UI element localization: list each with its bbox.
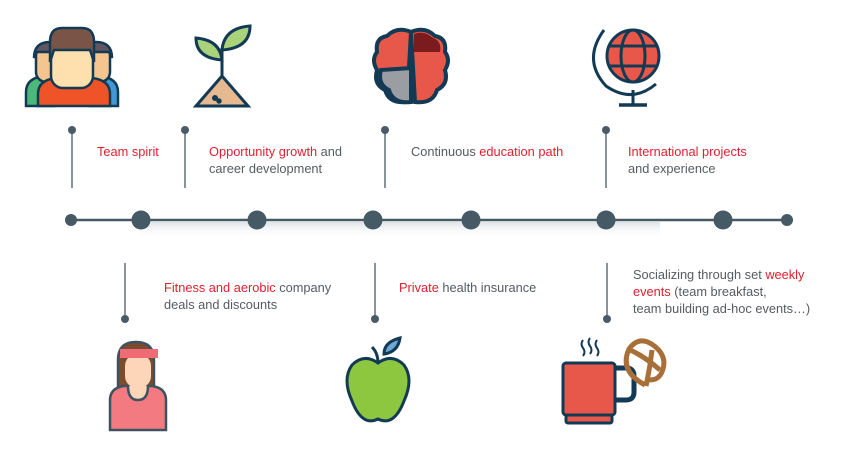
text: continuous education: Continuous education path xyxy=(411,144,563,159)
text: international projects: International projects xyxy=(628,144,747,159)
text: socializing: team building ad-hoc events…) xyxy=(633,301,810,316)
text: international projects: and experience xyxy=(628,161,716,176)
icon: fitness woman xyxy=(110,342,166,430)
timeline xyxy=(65,210,793,238)
text: team spirit: Team spirit xyxy=(97,144,159,159)
icon: team xyxy=(26,28,118,106)
text: opportunity growth xyxy=(209,144,342,176)
text: fitness: deals and discounts xyxy=(164,297,277,312)
text: health insurance: Private health insurance xyxy=(399,280,536,295)
text: opportunity growth: career development xyxy=(209,161,322,176)
text: international projects xyxy=(628,144,747,176)
text: fitness: Fitness and aerobic company xyxy=(164,280,331,295)
icon: brain xyxy=(374,30,448,102)
connectors xyxy=(68,126,611,323)
icon: mug and pretzel xyxy=(563,338,664,423)
icon: plant xyxy=(196,26,250,106)
text: opportunity growth: Opportunity growth and xyxy=(209,144,342,159)
text: socializing xyxy=(633,267,810,316)
icon: apple xyxy=(347,338,409,421)
icon: globe xyxy=(593,30,659,105)
text: socializing: Socializing through set weekly xyxy=(633,267,804,282)
text: fitness xyxy=(164,280,332,312)
text: socializing: events (team breakfast, xyxy=(633,284,767,299)
